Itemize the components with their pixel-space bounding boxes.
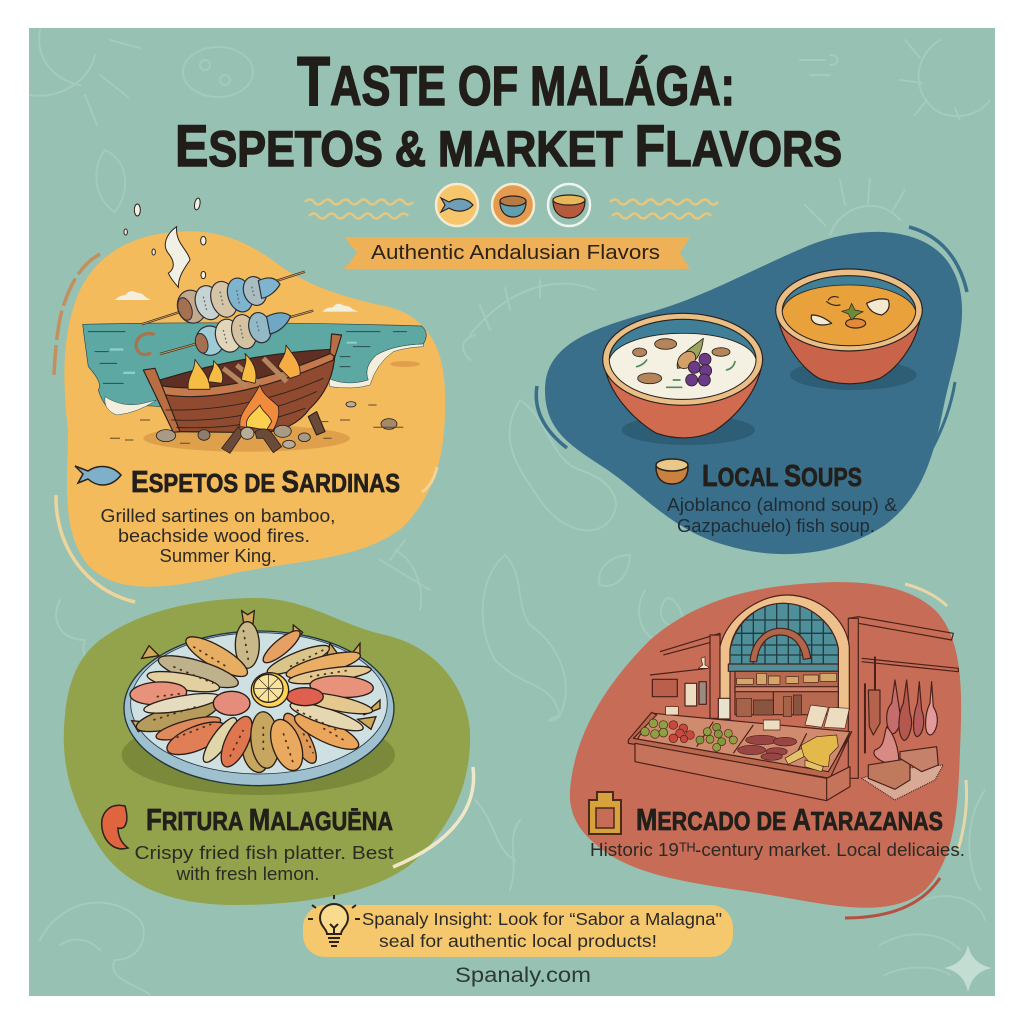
heading: local soups: LOCAL SOUPS [702, 458, 862, 493]
hanging hams [862, 657, 943, 800]
bowl: ajoblanco [603, 313, 763, 445]
campfire [156, 385, 397, 453]
icon: small soup bowl [656, 459, 688, 484]
bowl: gazpachuelo [776, 269, 922, 390]
heading: fritura malaguena: FRITURA MALAGUĒNA [146, 802, 393, 837]
description: espetos: Grilled sartines on bamboo, [100, 505, 336, 526]
description: fritura: with fresh lemon. [175, 863, 320, 884]
description: espetos: Summer King. [160, 545, 276, 566]
back walls [650, 617, 958, 675]
green blob [64, 598, 470, 905]
description: espetos [100, 505, 336, 566]
footer url: Spanaly.com [455, 963, 591, 987]
skewer top [142, 272, 305, 327]
description: espetos: beachside wood fires. [118, 525, 310, 546]
icon: light bulb [308, 895, 360, 946]
clouds [115, 291, 151, 300]
icon: soup badge [492, 184, 534, 226]
illustration: fried fish plate [122, 611, 395, 795]
blue blob [545, 232, 962, 554]
description: mercado: Historic 19ᵀᴴ-century market. Local delicaies. [590, 839, 965, 860]
description: soups: Gazpachuelo) fish soup. [677, 515, 875, 536]
counter [635, 713, 850, 777]
insight text: seal for authentic local products! [379, 931, 657, 951]
insight pill [303, 895, 733, 957]
panel: mercado de atarazanas [570, 582, 967, 918]
sand shadow [143, 425, 350, 452]
header decorative waves and icons [305, 184, 718, 226]
yellow blob [64, 231, 445, 587]
red blob [570, 582, 961, 908]
description: soups [667, 494, 898, 536]
grill fish and flames [188, 345, 300, 389]
ribbon banner [344, 237, 690, 269]
icon: bowl badge [548, 184, 590, 226]
boat with grill [143, 334, 342, 435]
heading: mercado de atarazanas: MERCADO DE ATARAZANAS [636, 802, 943, 837]
icon: clock tower [589, 792, 621, 834]
hook [136, 334, 153, 355]
insight text [362, 909, 722, 951]
arched window [720, 595, 849, 720]
insight text: Spanaly Insight: Look for “Sabor a Malagna" [362, 909, 722, 929]
icon: fish badge [436, 184, 478, 226]
wall sign items [652, 679, 677, 697]
sea [83, 323, 426, 413]
description: fritura: Crispy fried fish platter. Best [134, 842, 394, 863]
icon: shrimp [102, 805, 128, 849]
panel: espetos de sardinas [54, 198, 445, 602]
illustration: market stall [628, 595, 958, 801]
steam and droplets [165, 227, 190, 287]
illustration: two soup bowls [603, 269, 922, 445]
sparkle mark [944, 945, 992, 992]
skewer bottom [160, 310, 313, 358]
icon: sardine [75, 466, 121, 485]
title: ESPETOS & MARKET FLAVORS [175, 114, 842, 179]
panel: local soups [536, 227, 967, 554]
description: soups: Ajoblanco (almond soup) & [667, 494, 898, 515]
panel: fritura malaguena [64, 598, 474, 905]
description: fritura [134, 842, 394, 884]
ribbon banner: Authentic Andalusian Flavors [371, 241, 660, 264]
title [175, 42, 842, 179]
title: TASTE OF MALÁGA: [297, 42, 735, 120]
illustration: beach boat and grilled sardines [83, 198, 426, 453]
heading: espetos de sardinas: ESPETOS DE SARDINAS [131, 464, 400, 499]
